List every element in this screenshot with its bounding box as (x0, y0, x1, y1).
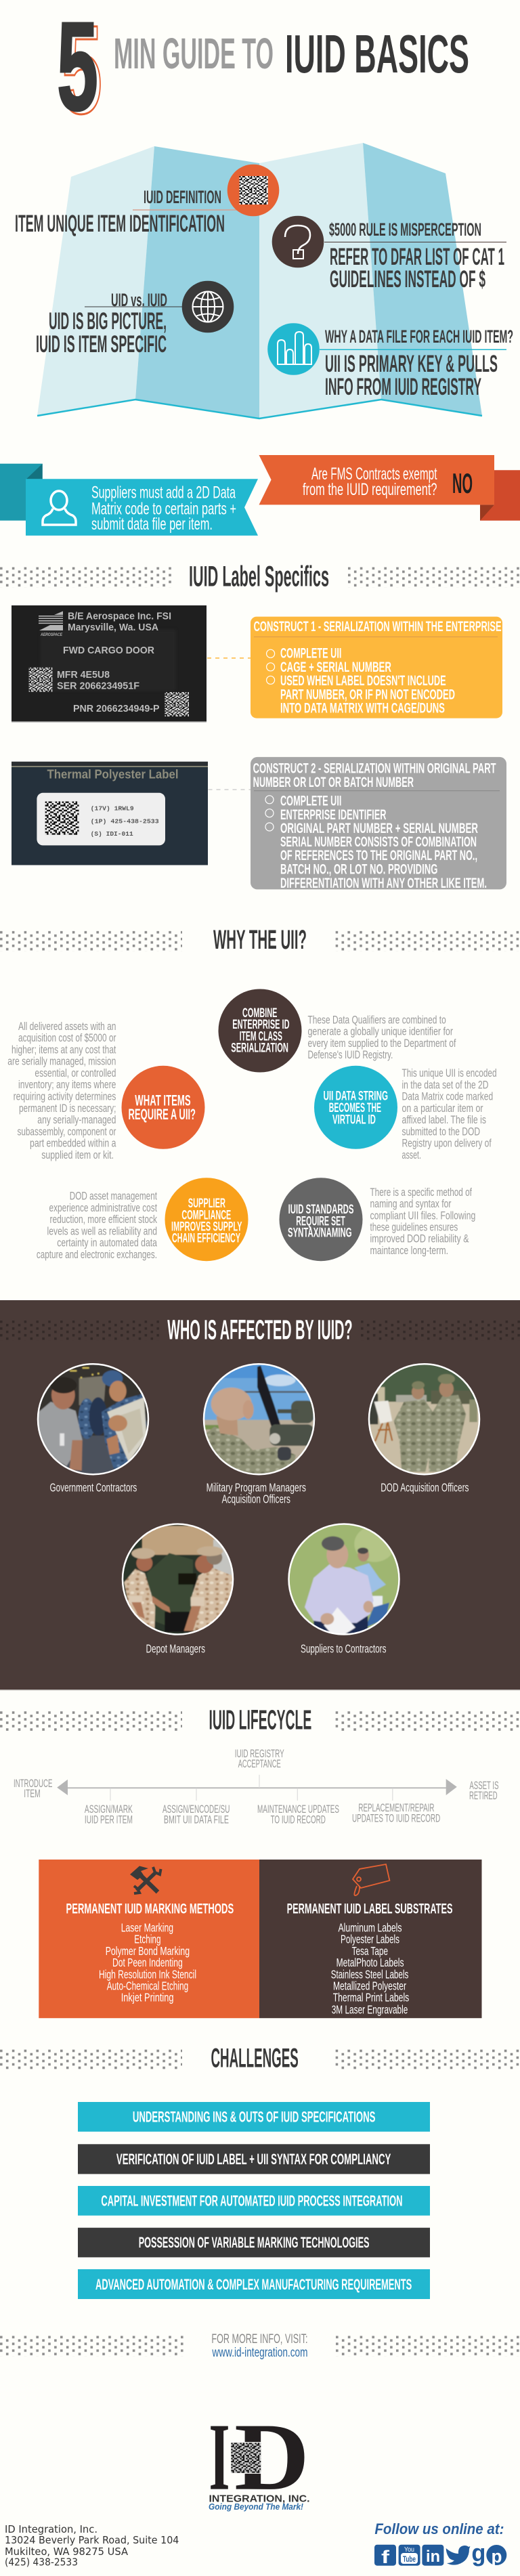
logo mark: AEROSPACE (40, 632, 63, 637)
heading band: lifecycle: IUID LIFECYCLE (209, 1704, 311, 1735)
marking methods list: Inkjet Printing (121, 1991, 174, 2004)
logo mark (39, 611, 63, 637)
callout: UID vs IUID (36, 281, 234, 358)
lifecycle timeline (14, 1748, 498, 1826)
circle: supplier compliance: COMPLIANCE (181, 1207, 231, 1222)
photo: DOD acquisition officers (368, 1362, 483, 1476)
data matrix (230, 2442, 261, 2474)
circle: what items: REQUIRE A UII? (129, 1106, 196, 1123)
address: Mukilteo, WA 98275 USA (5, 2546, 129, 2558)
heading band: Why the UII: WHY THE UII? (213, 925, 307, 955)
text: combine paragraph: These Data Qualifiers are combined to (307, 1013, 446, 1026)
bullet text: COMPLETE UII (280, 646, 341, 662)
text: what items paragraph: higher; items at any cost that (12, 1043, 116, 1056)
callout: IUID definition: ITEM UNIQUE ITEM IDENTIFICATION (15, 211, 225, 237)
lifecycle labels: UPDATES TO IUID RECORD (352, 1812, 440, 1824)
ribbon: FMS contracts (259, 455, 520, 521)
circle: combine: COMBINE (242, 1006, 277, 1021)
captions: Military Program Managers (207, 1480, 306, 1494)
heading band: lifecycle (0, 1704, 520, 1735)
captions: Government Contractors (50, 1480, 137, 1494)
photo: thermal polyester label: Thermal Polyester Label (47, 768, 179, 781)
circle: standards: IUID STANDARDS (288, 1202, 353, 1217)
captions: Depot Managers (146, 1641, 205, 1655)
callout: data file (267, 323, 513, 400)
icon: youtube (399, 2545, 420, 2566)
captions (50, 1480, 469, 1655)
circle: combine: SERIALIZATION (231, 1040, 288, 1055)
marking methods list: High Resolution Ink Stencil (99, 1967, 196, 1981)
circle: combine: ITEM CLASS (240, 1029, 282, 1044)
text: supplier paragraph: experience administrative cost (49, 1201, 157, 1214)
icon: question mark (272, 216, 324, 267)
logo: ID Integration (209, 2403, 310, 2512)
connector: label 2 to construct 2 (209, 789, 251, 790)
circle: what items (122, 1066, 204, 1149)
icon: linkedin: in (426, 2548, 440, 2566)
challenge bar 1 (78, 2102, 430, 2132)
icon: hammer and wrench (130, 1866, 161, 1893)
photo: black aerospace label: SER 2066234951F (57, 680, 139, 691)
captions: Acquisition Officers (222, 1493, 290, 1506)
heading band: Why the UII (0, 925, 520, 955)
text: data string paragraph: affixed label. The file is (402, 1113, 486, 1126)
captions: DOD Acquisition Officers (381, 1480, 469, 1494)
photo: black aerospace label: MFR 4E5U8 (57, 669, 110, 681)
connector: label 1 to construct 1 (207, 658, 252, 659)
text: what items paragraph: All delivered assets with an (18, 1020, 116, 1033)
text: supplier paragraph: certainty in automated data (57, 1237, 158, 1249)
more info band: www.id-integration.com (212, 2345, 307, 2360)
lifecycle labels: ACCEPTANCE (238, 1758, 281, 1770)
bullets (265, 796, 274, 831)
lifecycle labels: BMIT UII DATA FILE (164, 1813, 229, 1826)
callout: $5000 rule (272, 216, 506, 293)
text: what items paragraph: requiring activity determines (14, 1090, 116, 1103)
logo: ID Integration: INTEGRATION, INC. (209, 2493, 310, 2504)
panel: construct 1 (251, 617, 502, 718)
panel: who is affected (0, 1300, 520, 1690)
substrates list (331, 1920, 409, 2016)
ribbon: suppliers: Suppliers must add a 2D Data (91, 483, 236, 502)
bullets (267, 649, 275, 684)
text: standards paragraph: naming and syntax for (370, 1197, 452, 1210)
circle: standards: SYNTAX/NAMING (288, 1225, 352, 1240)
folded map (37, 143, 482, 418)
text: what items paragraph: essential, or controlled (35, 1067, 116, 1079)
icon: facebook (374, 2545, 396, 2567)
circle: supplier compliance: SUPPLIER (188, 1196, 225, 1211)
marking methods list: Polymer Bond Marking (106, 1944, 190, 1958)
callout: IUID definition: IUID DEFINITION (144, 187, 221, 207)
text: standards paragraph (370, 1186, 475, 1257)
bullet text: CAGE + SERIAL NUMBER (280, 660, 391, 675)
icon: data matrix badge (228, 165, 279, 216)
social follow block (374, 2520, 506, 2567)
circle: standards: REQUIRE SET (296, 1214, 345, 1228)
more info band: FOR MORE INFO, VISIT: (211, 2332, 307, 2346)
captions: Suppliers to Contractors (301, 1641, 387, 1655)
social follow block: Follow us online at: (374, 2520, 504, 2537)
title text grey: MIN GUIDE TO (114, 29, 274, 78)
lifecycle labels: RETIRED (469, 1790, 498, 1802)
icon: youtube: You (404, 2546, 414, 2554)
text: supplier paragraph: capture and electronic exchanges. (37, 1248, 157, 1261)
text: what items paragraph: inventory; any items where (18, 1078, 116, 1091)
ribbon: FMS contracts: Are FMS Contracts exempt (311, 465, 437, 484)
text: combine paragraph: Defense's IUID Registry. (307, 1048, 393, 1061)
text: supplier paragraph: reduction, more efficient stock (50, 1213, 157, 1226)
ribbon: FMS contracts: from the IUID requirement? (303, 480, 437, 499)
circle: standards (279, 1178, 363, 1261)
heading band: IUID Label Specifics: IUID Label Specifics (189, 561, 329, 593)
text: data string paragraph: asset. (402, 1149, 421, 1161)
marking methods list: Etching (134, 1933, 161, 1946)
heading band: challenges (0, 2044, 520, 2074)
logo: ID Integration: D (234, 2403, 309, 2510)
bullet text (280, 646, 455, 716)
photo: black aerospace label: PNR 2066234949-P (73, 703, 160, 714)
arrow: right (446, 1779, 457, 1795)
lifecycle labels: ASSIGN/ENCODE/SU (162, 1803, 230, 1816)
text: standards paragraph: improved DOD reliability & (370, 1232, 469, 1245)
address (5, 2523, 179, 2568)
text: combine paragraph (307, 1013, 456, 1061)
callout: UID vs IUID: UID IS BIG PICTURE, (49, 308, 167, 335)
text: supplier paragraph (37, 1190, 158, 1261)
lifecycle labels: INTRODUCE (14, 1778, 52, 1790)
address: ID Integration, Inc. (5, 2523, 98, 2535)
lifecycle labels: ASSET IS (469, 1780, 498, 1792)
callout: IUID definition (15, 165, 279, 237)
text: standards paragraph: these guidelines ensures (370, 1220, 458, 1234)
marking methods list: Auto-Chemical Etching (107, 1979, 188, 1992)
circle: combine (218, 989, 302, 1073)
text: what items paragraph: are serially managed, mission (7, 1055, 116, 1068)
text: what items paragraph: part embedded within a (30, 1136, 116, 1150)
text: combine paragraph: every item supplied to the Department of (307, 1037, 456, 1050)
logo: ID Integration: I (209, 2403, 230, 2510)
lifecycle labels: REPLACEMENT/REPAIR (358, 1802, 435, 1814)
more info band (0, 2332, 520, 2360)
photo: black aerospace label: B/E Aerospace Inc. FSI (68, 611, 171, 622)
icon: person (43, 491, 76, 525)
photo: depot managers (122, 1524, 235, 1637)
panel: construct 2: NUMBER OR LOT OR BATCH NUMBER (253, 774, 414, 790)
text: data string paragraph: in the data set of the 2D (402, 1078, 488, 1091)
photo: thermal polyester label (12, 762, 208, 865)
circle: data string: UII DATA STRING (324, 1089, 388, 1104)
bullet text (280, 793, 487, 891)
substrates list: Stainless Steel Labels (331, 1967, 408, 1981)
text: what items paragraph: acquisition cost of $5000 or (18, 1031, 116, 1044)
text: supplier paragraph: DOD asset management (70, 1190, 157, 1203)
text: combine paragraph: generate a globally unique identifier for (307, 1025, 453, 1038)
icon: google plus: g (471, 2539, 485, 2567)
text: what items paragraph: permanent ID is necessary; (19, 1102, 116, 1115)
icon: twitter bird (446, 2546, 470, 2565)
marking methods list (99, 1920, 196, 2004)
circle: what items: WHAT ITEMS (135, 1092, 191, 1109)
photo: thermal polyester label: (1P) 425-438-2533 (91, 818, 159, 825)
photo: thermal polyester label: (17V) 1RWL9 (91, 804, 134, 812)
icon: pinterest (486, 2545, 506, 2567)
panel: construct 2 (251, 757, 506, 891)
icon: globe (182, 281, 234, 332)
text: standards paragraph: compliant UII files. Following (370, 1209, 475, 1222)
marking methods list: Dot Peen Indenting (112, 1956, 183, 1969)
substrates list: Polyester Labels (341, 1933, 399, 1946)
callout: UID vs IUID: IUID IS ITEM SPECIFIC (36, 331, 167, 358)
lifecycle labels: IUID REGISTRY (235, 1748, 284, 1760)
photo: black aerospace label (12, 605, 207, 722)
challenge bar 5 (78, 2269, 430, 2299)
address: 13024 Beverly Park Road, Suite 104 (5, 2534, 179, 2546)
circle: data string (314, 1066, 397, 1149)
data matrix (45, 801, 79, 835)
panel: marking methods: PERMANENT IUID MARKING METHODS (66, 1902, 234, 1917)
marking methods list: Laser Marking (121, 1920, 173, 1934)
logo: ID Integration: Going Beyond The Mark! (209, 2502, 304, 2512)
heading band: challenges: CHALLENGES (211, 2044, 299, 2074)
text: standards paragraph: There is a specific method of (370, 1186, 472, 1199)
circle: data string: BECOMES THE (329, 1100, 381, 1115)
challenge bar 2 (78, 2144, 430, 2174)
photo: black aerospace label: Marysville, Wa. USA (68, 622, 158, 633)
arrow: left (57, 1780, 68, 1795)
big numeral 5: 5 (57, 0, 98, 137)
big numeral 5: 5 (61, 0, 102, 140)
bullet text: COMPLETE UII (280, 793, 341, 809)
text: what items paragraph (7, 1020, 116, 1161)
substrates list: Thermal Print Labels (333, 1991, 409, 2004)
lifecycle labels: IUID PER ITEM (85, 1813, 133, 1826)
text: data string paragraph: on a particular item or (402, 1102, 483, 1115)
circle: combine: ENTERPRISE ID (232, 1017, 290, 1032)
icon: youtube: Tube (403, 2554, 416, 2564)
text: standards paragraph: maintance long-term. (370, 1244, 448, 1257)
text: what items paragraph: any serially-managed (37, 1113, 116, 1126)
text: supplier paragraph: levels as well as reliability and (47, 1224, 157, 1237)
photo: thermal polyester label: (S) IDI-011 (91, 830, 133, 838)
big numeral 5 (57, 0, 102, 140)
bullet text: ENTERPRISE IDENTIFIER (280, 807, 386, 823)
text: data string paragraph (402, 1067, 497, 1161)
circle: supplier compliance: CHAIN EFFICIENCY (172, 1231, 240, 1246)
icon: facebook: f (381, 2547, 390, 2567)
icon: tag (353, 1864, 389, 1895)
circle: supplier compliance: IMPROVES SUPPLY (171, 1219, 242, 1234)
photo: government contractors (36, 1362, 151, 1478)
panel: marking methods (39, 1860, 259, 2018)
ribbon: suppliers: Matrix code to certain parts + (91, 499, 236, 518)
heading band: who is affected (0, 1314, 520, 1346)
lifecycle labels: ASSIGN/MARK (85, 1803, 133, 1816)
icon: bar chart (267, 323, 320, 375)
photo: black aerospace label: FWD CARGO DOOR (63, 645, 154, 656)
icon: pinterest: p (492, 2546, 502, 2567)
address: (425) 438-2533 (5, 2556, 78, 2568)
challenge bar 4 (78, 2228, 430, 2257)
icon: linkedin (422, 2545, 443, 2566)
lifecycle labels: ITEM (24, 1788, 41, 1800)
circle: supplier compliance (165, 1178, 248, 1261)
lifecycle labels (14, 1748, 498, 1826)
challenge bar 3 (78, 2186, 430, 2216)
ribbon: suppliers: submit data file per item. (91, 515, 213, 534)
substrates list: Tesa Tape (352, 1944, 388, 1958)
text: what items paragraph: subassembly, component or (18, 1125, 116, 1138)
title (57, 0, 469, 140)
photo: military program managers (203, 1362, 318, 1478)
ribbon: suppliers (0, 464, 258, 536)
substrates list: 3M Laser Engravable (332, 2002, 408, 2016)
lifecycle labels: MAINTENANCE UPDATES (257, 1803, 339, 1816)
callout: UID vs IUID: UID vs. IUID (111, 290, 167, 310)
heading band: IUID Label Specifics (0, 561, 520, 593)
text: what items paragraph: supplied item or kit. (41, 1149, 114, 1161)
panel: label substrates (259, 1860, 482, 2018)
data matrix (29, 668, 52, 692)
lifecycle labels: TO IUID RECORD (271, 1813, 326, 1826)
ribbon: FMS contracts: NO (452, 467, 473, 499)
substrates list: MetalPhoto Labels (337, 1956, 404, 1969)
substrates list: Metallized Polyester (333, 1979, 406, 1992)
photo: suppliers to contractors (288, 1524, 402, 1637)
substrates list: Aluminum Labels (339, 1920, 402, 1934)
circle: data string: VIRTUAL ID (332, 1112, 376, 1127)
text: data string paragraph: submitted to the DOD (402, 1125, 480, 1138)
data matrix (165, 692, 189, 716)
